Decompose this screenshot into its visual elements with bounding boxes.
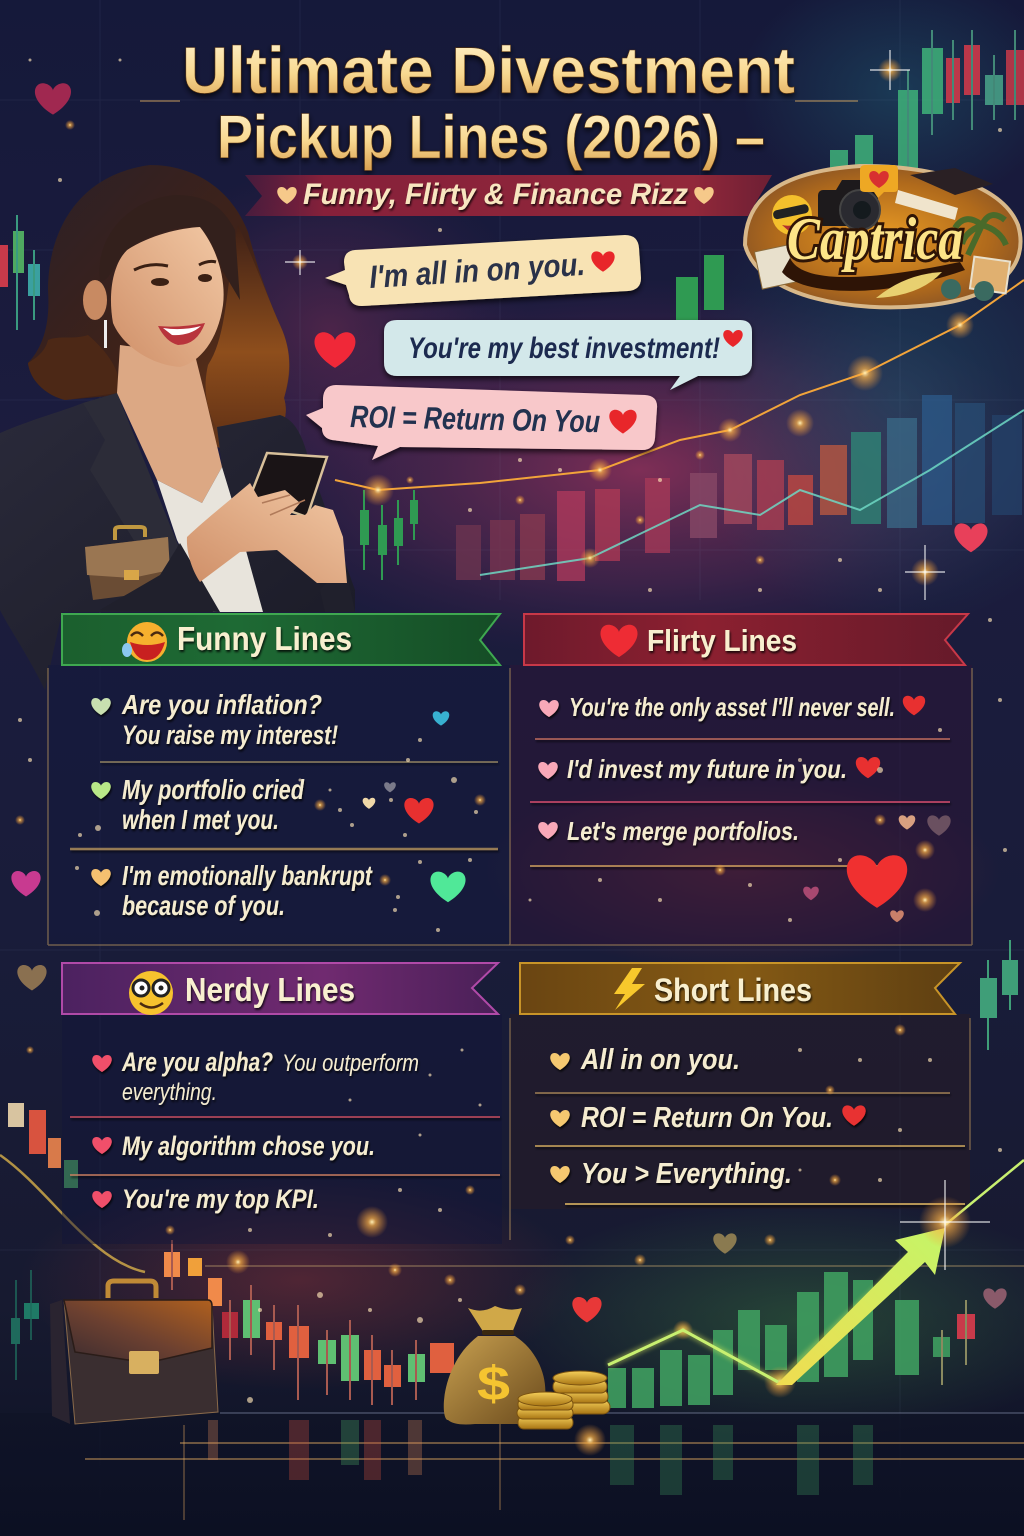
speech bubble 2 xyxy=(384,320,752,390)
list: flirty lines xyxy=(530,692,950,866)
shirt xyxy=(157,467,263,612)
icon: gold coins xyxy=(517,1371,610,1429)
chest and neck xyxy=(117,345,222,503)
speech bubble 3 xyxy=(306,385,657,460)
title: Pickup Lines (2026) – xyxy=(217,103,765,171)
briefcase small xyxy=(85,527,170,600)
feather xyxy=(876,272,942,298)
list: funny lines: because of you. xyxy=(122,890,285,921)
chat icon xyxy=(860,165,898,198)
grad cap xyxy=(910,168,993,195)
icon: laughing emoji xyxy=(122,622,167,662)
subtitle ribbon: Funny, Flirty & Finance Rizz xyxy=(303,178,688,211)
icon: lightning bolt xyxy=(614,968,645,1010)
face xyxy=(111,227,224,367)
chart: glowing trend lines xyxy=(335,280,1024,575)
list: funny lines: Are you inflation? xyxy=(121,689,322,720)
banner: flirty lines: Flirty Lines xyxy=(647,623,797,658)
list: nerdy lines: My algorithm chose you. xyxy=(122,1131,375,1161)
phone xyxy=(250,453,327,517)
arrow: rising green trend xyxy=(608,1160,1024,1385)
speech bubble 3: ROI = Return On You xyxy=(350,399,601,439)
banner: flirty lines xyxy=(524,614,968,665)
jacket xyxy=(0,393,355,690)
list: funny lines: I'm emotionally bankrupt xyxy=(122,860,373,891)
hearts: funny panel xyxy=(363,711,466,902)
list: flirty lines: Let's merge portfolios. xyxy=(567,816,799,846)
list: nerdy lines: You're my top KPI. xyxy=(122,1184,319,1214)
banner: funny lines xyxy=(62,614,500,665)
logo: Captrica xyxy=(745,165,1021,307)
title: Ultimate Divestment xyxy=(182,33,795,107)
brand swash xyxy=(782,258,965,291)
icon: money bag xyxy=(444,1306,545,1424)
panel: nerdy lines xyxy=(62,963,502,1244)
banner: nerdy lines: Nerdy Lines xyxy=(185,971,355,1008)
hearts: flirty panel xyxy=(803,696,951,922)
logo: Captrica: Captrica xyxy=(787,206,963,272)
icon: nerd emoji xyxy=(129,971,173,1015)
list: flirty lines: I'd invest my future in you. xyxy=(567,754,847,784)
subtitle ribbon xyxy=(245,175,772,216)
floating hearts xyxy=(11,83,1007,1323)
speech bubble 1 xyxy=(325,235,641,306)
panel: short lines xyxy=(510,963,970,1240)
diploma xyxy=(895,190,958,220)
banner: funny lines: Funny Lines xyxy=(177,620,352,657)
illustration: woman with phone xyxy=(0,165,355,690)
title xyxy=(140,33,858,171)
list: nerdy lines xyxy=(70,1047,500,1214)
icon: money bag: $ xyxy=(477,1358,510,1411)
list: nerdy lines: everything. xyxy=(122,1079,217,1106)
lapel shading xyxy=(83,393,178,590)
side hair over forehead xyxy=(99,195,240,300)
speech bubble 2: You're my best investment! xyxy=(408,332,720,365)
list: short lines: You > Everything. xyxy=(581,1158,792,1190)
panel: flirty lines xyxy=(510,614,972,945)
list: funny lines: My portfolio cried xyxy=(122,774,305,805)
chart: upper right candlesticks xyxy=(0,30,1024,581)
sunglasses xyxy=(941,279,994,301)
list: funny lines: You raise my interest! xyxy=(122,720,338,750)
emoji sunglasses xyxy=(772,195,812,235)
jacket sleeve xyxy=(100,543,220,612)
list: nerdy lines: You outperform xyxy=(282,1050,419,1077)
speech bubble 1: I'm all in on you. xyxy=(368,246,586,295)
photos xyxy=(754,245,796,289)
list: flirty lines: You're the only asset I'll never sell. xyxy=(569,692,895,722)
banner: nerdy lines xyxy=(62,963,498,1015)
ear xyxy=(83,280,107,320)
icon: briefcase xyxy=(50,1281,218,1424)
hands xyxy=(187,483,347,583)
list: short lines: All in on you. xyxy=(580,1044,740,1076)
sparkle stars xyxy=(285,50,945,600)
list: funny lines: when I met you. xyxy=(122,804,279,835)
panel: funny lines xyxy=(48,614,510,945)
woman's hair xyxy=(28,165,290,456)
banner: short lines xyxy=(520,963,960,1014)
icon: red heart xyxy=(600,625,638,657)
list: nerdy lines: Are you alpha? xyxy=(121,1047,273,1077)
palm xyxy=(955,215,1006,255)
chart: bottom candlesticks xyxy=(0,940,1024,1536)
list: short lines: ROI = Return On You. xyxy=(581,1102,833,1134)
list: short lines xyxy=(535,1044,965,1204)
list: funny lines xyxy=(70,689,498,921)
banner: short lines: Short Lines xyxy=(654,972,812,1008)
camera icon xyxy=(818,180,880,230)
